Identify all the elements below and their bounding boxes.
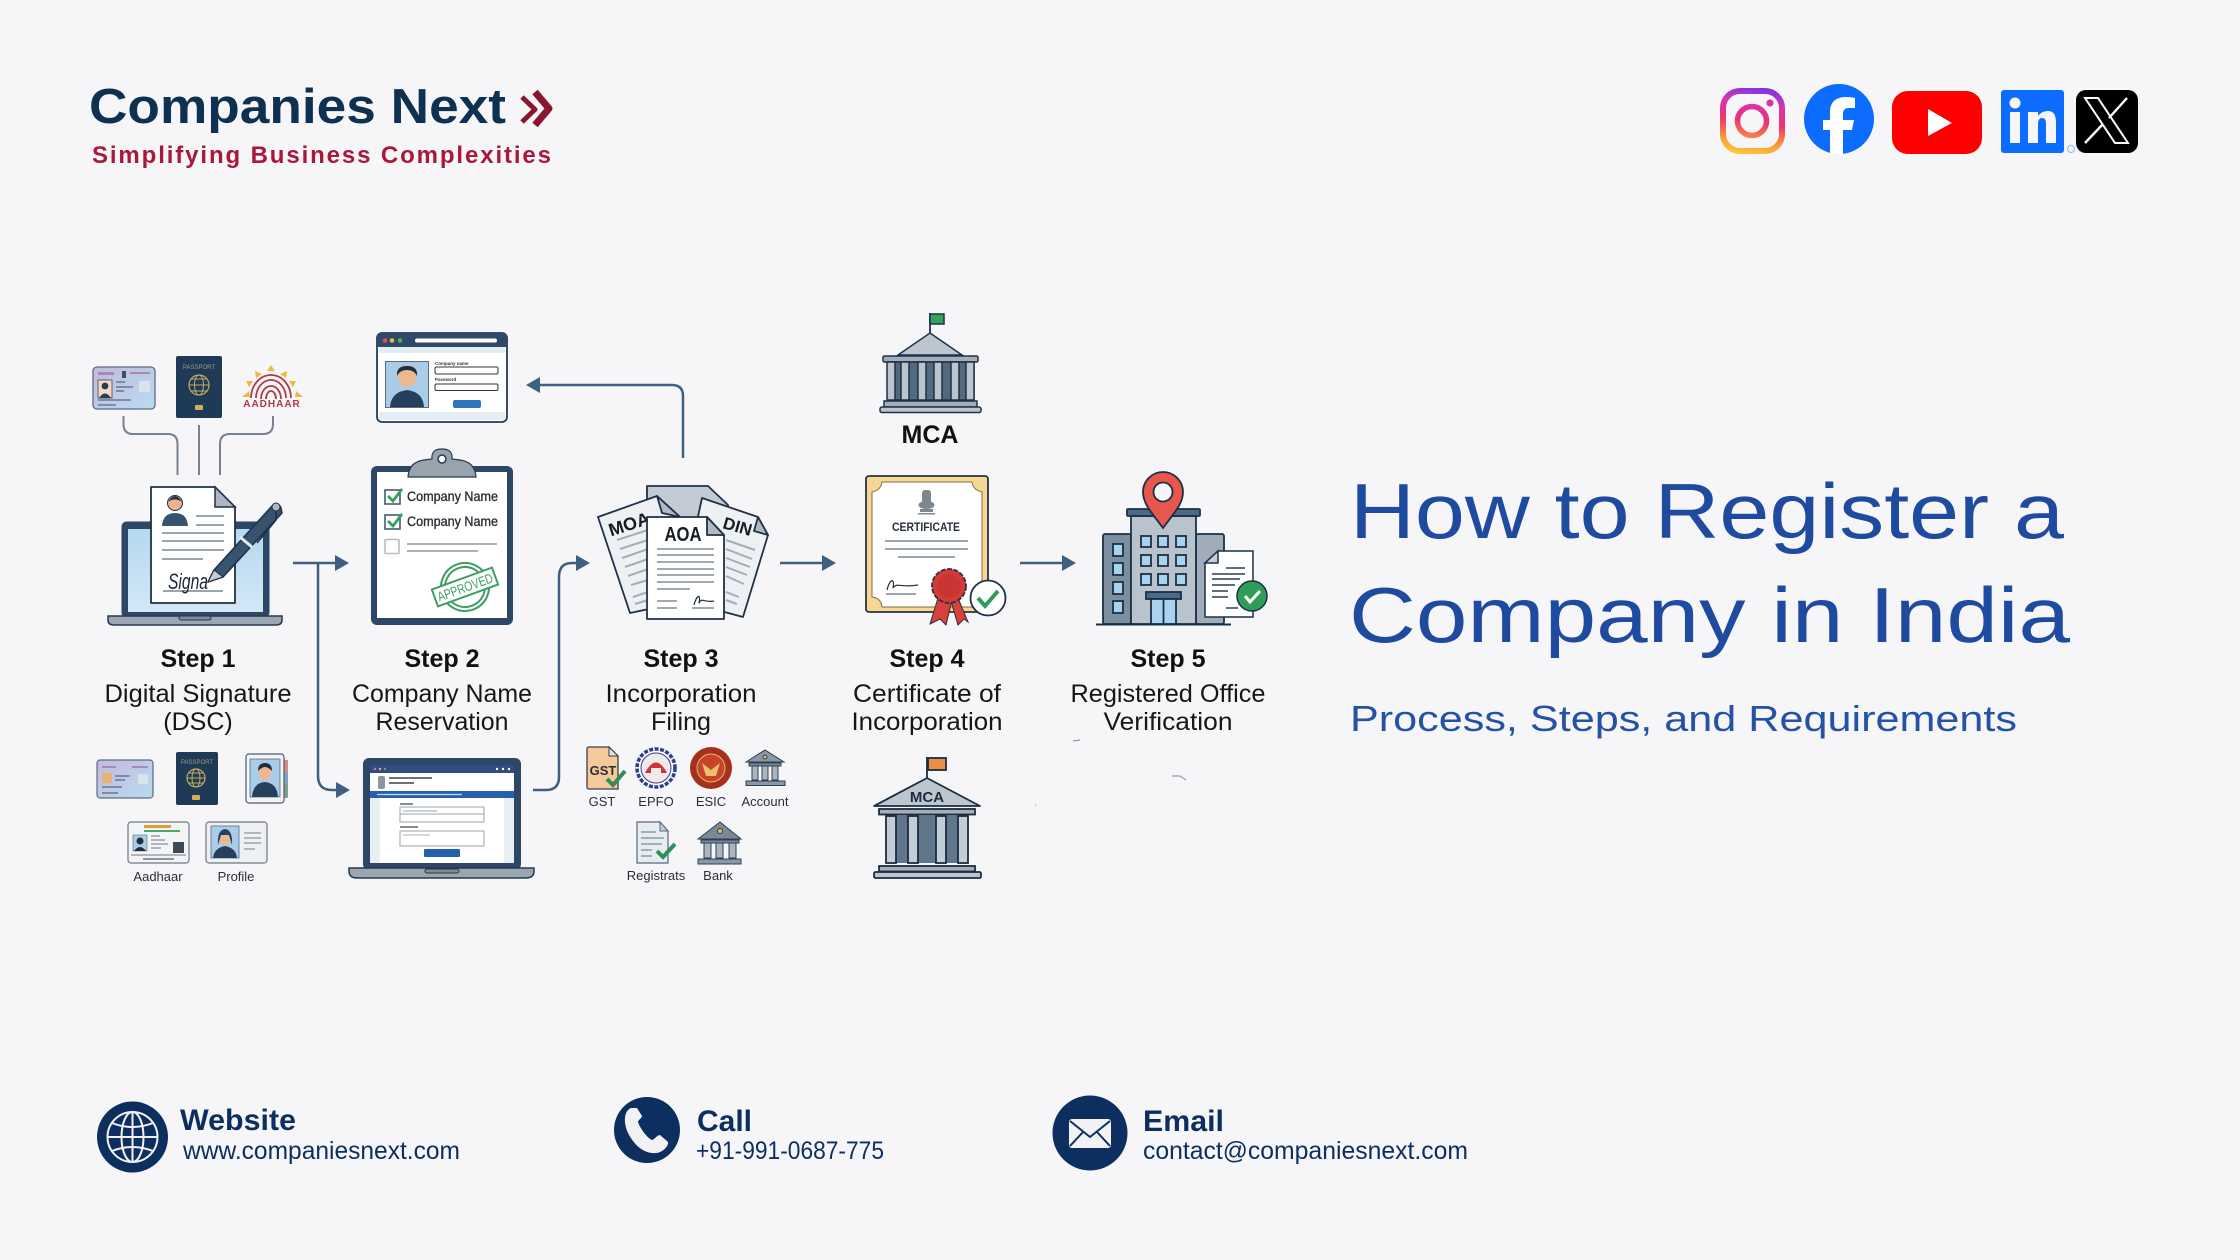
icon: PAN card top xyxy=(93,367,155,409)
icon: MCA building with orange flag: MCA xyxy=(910,789,944,806)
Step 2 text xyxy=(352,645,532,736)
icon: Bank xyxy=(698,822,741,864)
contact: call xyxy=(614,1097,884,1165)
arrow: Step 3 to Step 4 xyxy=(780,562,823,564)
icon: envelope xyxy=(1052,1096,1128,1170)
icon: laptop with signed document (Step 1) xyxy=(108,487,282,625)
website URL: www.companiesnext.com xyxy=(182,1137,460,1165)
icon: PAN card xyxy=(97,760,153,798)
subtitle: Process, Steps, and Requirements xyxy=(1350,698,2017,739)
Step 4 text: Incorporation xyxy=(852,708,1002,736)
icon: Aadhaar card xyxy=(128,822,189,863)
icon: Aadhaar logo: AADHAAR xyxy=(243,399,301,410)
label: Account: Account xyxy=(742,794,789,809)
Step 3 registrations xyxy=(587,747,789,883)
icon: office building with pin (Step 5) xyxy=(1096,472,1267,624)
icon: profile card xyxy=(206,822,267,863)
approved stamp xyxy=(427,554,503,620)
contact: email xyxy=(1052,1096,1468,1170)
stray marks left by image cleanup xyxy=(1035,740,1186,805)
icon: document stack MOA AOA DIN (Step 3): MOA xyxy=(606,508,652,540)
icon: certificate (Step 4): CERTIFICATE xyxy=(892,520,960,534)
icon: Account bank xyxy=(746,750,785,786)
label: ESIC: ESIC xyxy=(696,794,726,809)
icon: Facebook xyxy=(1804,84,1874,154)
logo chevrons xyxy=(522,92,549,125)
Step 3 text: Incorporation xyxy=(606,680,756,708)
arrows: Step 1 to Step 2 xyxy=(293,563,337,790)
icon: document stack MOA AOA DIN (Step 3) xyxy=(598,486,768,619)
icon: GST xyxy=(587,747,625,789)
Step 1 text: Digital Signature xyxy=(104,680,292,708)
Step 3 text xyxy=(606,645,756,736)
title: Company in India xyxy=(1349,571,2071,659)
phone number: +91-991-0687-775 xyxy=(696,1137,884,1165)
label: Profile: Profile xyxy=(218,869,254,884)
icon: passport top xyxy=(176,356,222,418)
label: EPFO: EPFO xyxy=(638,794,674,809)
Step 3 text: Filing xyxy=(651,708,711,736)
Step 5 text: Registered Office xyxy=(1070,680,1266,708)
label: Aadhaar: Aadhaar xyxy=(133,869,183,884)
icon: passport: PASSPORT xyxy=(181,760,213,766)
title: How to Register a xyxy=(1350,467,2065,555)
social icons xyxy=(1723,84,2138,154)
icon: certificate (Step 4) xyxy=(866,476,1006,625)
icon: browser name form: Password xyxy=(435,377,457,382)
Step 5 text xyxy=(1070,645,1266,736)
logo wordmark: Companies Next xyxy=(89,80,506,134)
icon: X xyxy=(2076,90,2138,153)
contact: website xyxy=(97,1102,460,1172)
label: Registrats: Registrats xyxy=(627,868,686,883)
Step 4 text: Step 4 xyxy=(889,645,965,673)
icon: browser name form xyxy=(377,333,507,422)
Step 2 text: Reservation xyxy=(376,708,508,736)
icon: ESIC xyxy=(690,747,732,789)
checklist: Company Name xyxy=(407,513,498,529)
icon: document stack MOA AOA DIN (Step 3): DIN xyxy=(721,514,754,540)
icon: laptop with signed document (Step 1): Signa xyxy=(168,569,208,594)
label: Call: Call xyxy=(697,1105,752,1138)
icon: document stack MOA AOA DIN (Step 3): AOA xyxy=(664,524,702,546)
icon: Aadhaar logo xyxy=(242,365,303,410)
arrow: Step 3 back to name form xyxy=(539,385,683,458)
icon: profile book xyxy=(246,754,288,803)
icon: laptop with MCA form xyxy=(349,758,534,878)
icon: MCA building with green flag xyxy=(880,313,981,412)
arrow: Step 2 to Step 3 xyxy=(533,563,577,790)
connector lines: Step 1 documents xyxy=(124,416,273,475)
label: Email: Email xyxy=(1143,1105,1224,1138)
label: Website: Website xyxy=(180,1104,296,1137)
icon: phone xyxy=(614,1097,680,1163)
Step 1 text: (DSC) xyxy=(163,708,233,736)
logo: Companies Next xyxy=(89,80,551,169)
icon: browser name form: Company name xyxy=(435,361,469,366)
Step 1 text: Step 1 xyxy=(160,645,236,673)
Step 5 text: Step 5 xyxy=(1130,645,1206,673)
Step 2 text: Company Name xyxy=(352,680,532,708)
label: GST: GST xyxy=(589,794,615,809)
approved stamp: APPROVED xyxy=(435,570,495,604)
icon: passport top: PASSPORT xyxy=(183,365,215,371)
Step 2 text: Step 2 xyxy=(404,645,480,673)
label: Bank: Bank xyxy=(703,868,733,883)
Step 4 text xyxy=(852,645,1002,736)
icon: passport xyxy=(176,752,218,805)
Step 1 required documents xyxy=(97,752,288,884)
icon: GST: GST xyxy=(590,763,616,778)
logo tagline: Simplifying Business Complexities xyxy=(92,142,551,169)
icon: EPFO xyxy=(637,749,675,787)
icon: MCA building with orange flag xyxy=(874,757,981,878)
icon: Registrats document xyxy=(637,822,675,863)
Step 3 text: Step 3 xyxy=(643,645,719,673)
checklist: Company Name xyxy=(407,488,498,504)
Step 1 text xyxy=(104,645,292,736)
checklist xyxy=(385,488,498,554)
label: MCA: MCA xyxy=(902,421,958,449)
icon: globe xyxy=(97,1102,168,1172)
Step 4 text: Certificate of xyxy=(853,680,1001,708)
email address: contact@companiesnext.com xyxy=(1143,1137,1468,1165)
icon: Instagram xyxy=(1723,91,1782,151)
Step 5 text: Verification xyxy=(1104,708,1232,736)
title xyxy=(1349,467,2071,659)
icon: YouTube xyxy=(1892,91,1982,154)
icon: LinkedIn xyxy=(2001,90,2074,153)
icon: clipboard (Step 2) xyxy=(371,449,513,625)
arrow: Step 4 to Step 5 xyxy=(1020,562,1063,564)
